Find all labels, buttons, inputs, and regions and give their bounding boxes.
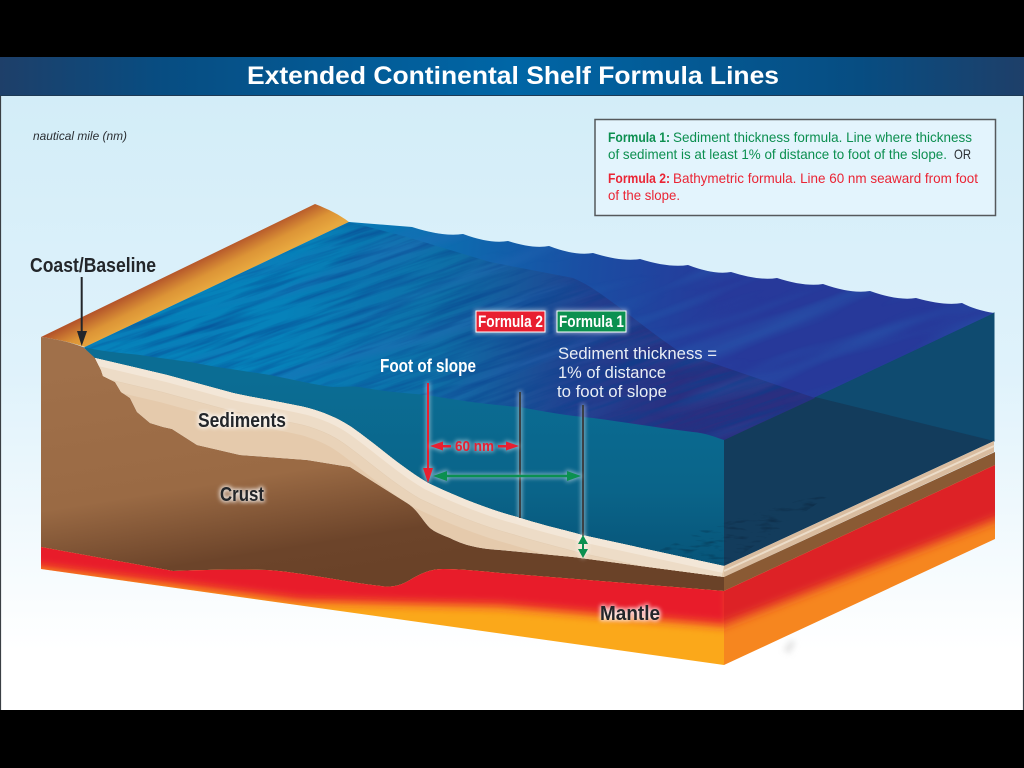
sediment thickness note: Sediment thickness = (558, 344, 717, 363)
sediment and crust: right face (724, 441, 995, 591)
label: foot of slope: Foot of slope (380, 356, 476, 376)
formula 1 definition: of sediment is at least 1% of distance to foot of the slope. (608, 146, 947, 162)
sea surface (85, 222, 994, 440)
label: 60 nm: 60 nm (455, 438, 494, 455)
crust: front face (41, 337, 724, 591)
formula 2 definition: Bathymetric formula. Line 60 nm seaward from foot (673, 170, 978, 186)
label: crust: Crust (220, 484, 264, 506)
label: coast/baseline: Coast/Baseline (30, 254, 156, 277)
formula 1 definition: Sediment thickness formula. Line where thickness (673, 129, 972, 145)
formula 2 limit line (519, 392, 521, 518)
front water face (83, 347, 724, 566)
formula 1 definition: Formula 1: (608, 129, 670, 145)
right water face (724, 313, 994, 566)
sediment thickness note (557, 344, 717, 401)
unit note: nautical mile (nm) (33, 129, 127, 143)
arrow: foot of slope marker (423, 383, 433, 483)
formula 2 definition: Formula 2: (608, 170, 670, 186)
sediment thickness note: to foot of slope (557, 382, 667, 401)
label: sediments: Sediments (198, 410, 286, 432)
arrow: 60 nm right (498, 442, 519, 450)
arrow: 60 nm left (430, 442, 451, 450)
mantle: front face (41, 547, 724, 665)
60 nm span (430, 438, 519, 455)
formula 1 limit line (582, 405, 584, 536)
formula 2 definition: of the slope. (608, 187, 680, 203)
title: Extended Continental Shelf Formula Lines (247, 62, 779, 90)
arrow: sediment thickness (578, 535, 588, 558)
faint shadow mark (783, 640, 796, 654)
formula 1 definition (608, 129, 972, 162)
seafloor speckle (660, 497, 825, 563)
legend box: formula definitions (595, 120, 996, 216)
label: mantle: Mantle (600, 603, 660, 625)
formula 2 definition (608, 170, 978, 203)
arrow: distance to foot of slope (433, 471, 581, 481)
sediment layers: front face (90, 350, 730, 585)
label: coast/baseline (30, 254, 156, 346)
sediment thickness note: 1% of distance (558, 363, 666, 382)
title bar (0, 57, 1024, 96)
tag: formula 1: Formula 1 (559, 313, 624, 331)
arrow: to coast (77, 277, 87, 346)
formula 1 definition: OR (954, 146, 971, 162)
mantle: right face (724, 465, 995, 665)
tag: formula 2: Formula 2 (478, 313, 543, 331)
land surface strip (41, 204, 349, 347)
